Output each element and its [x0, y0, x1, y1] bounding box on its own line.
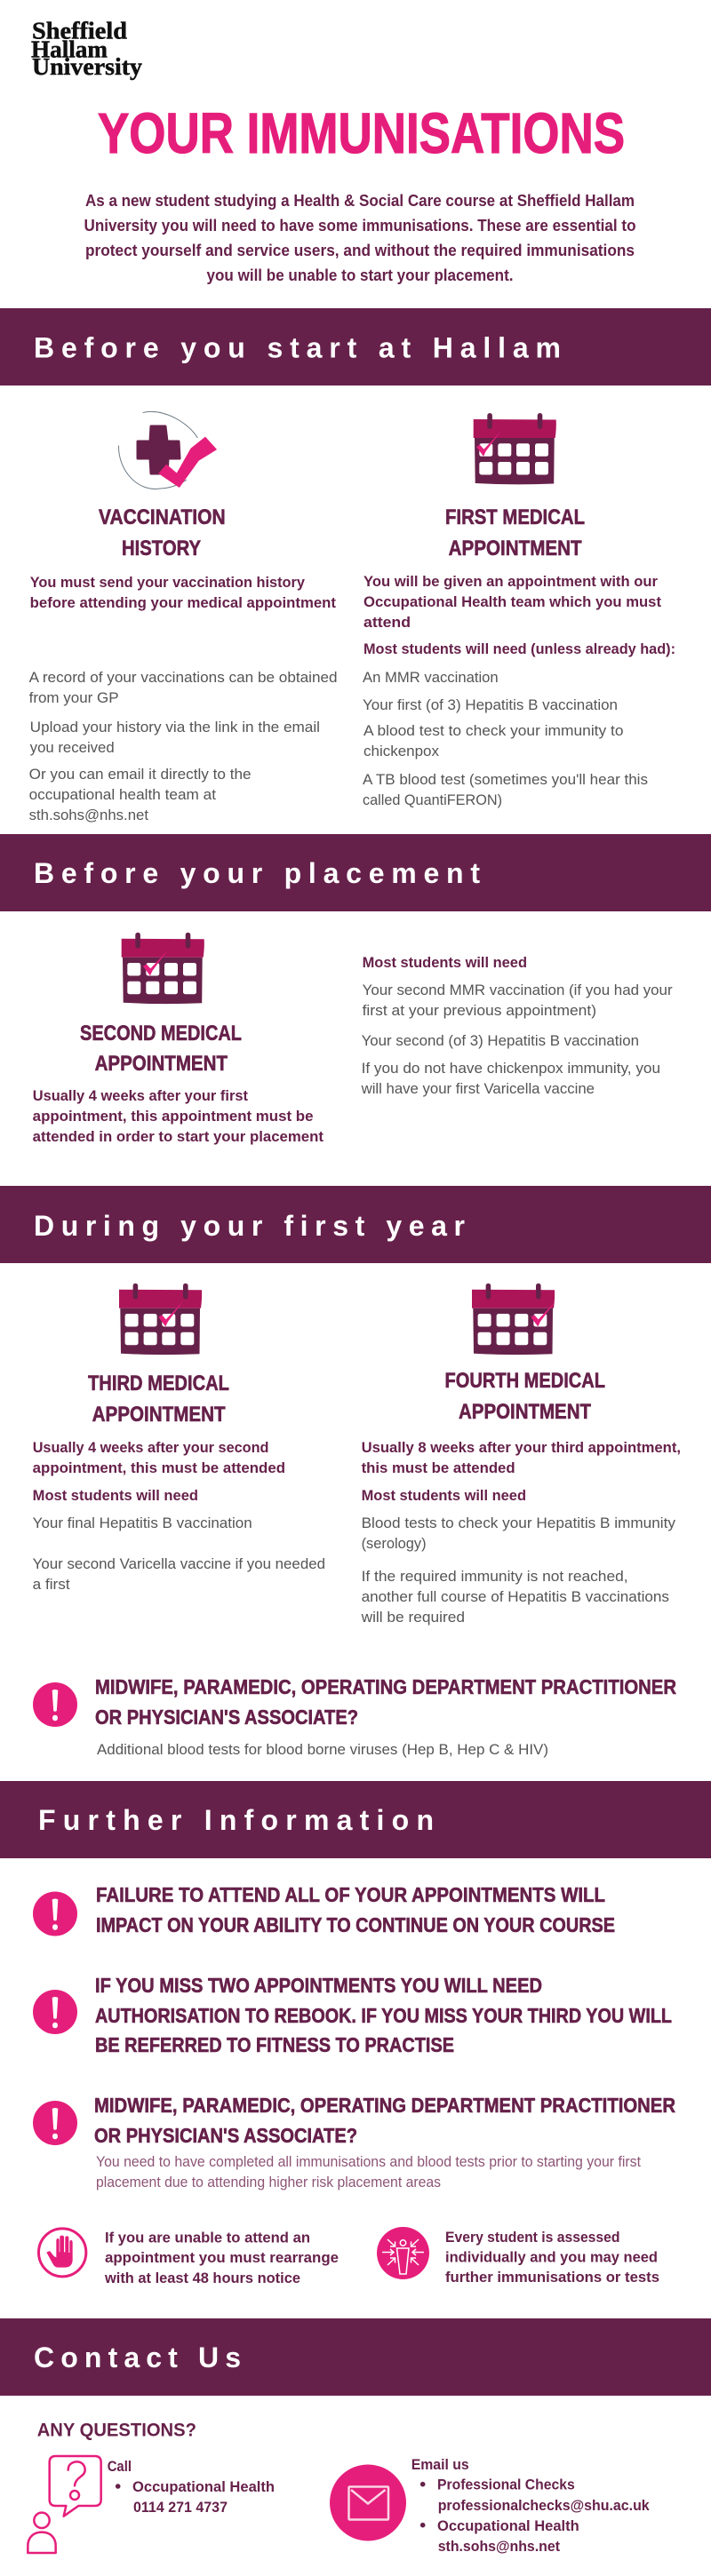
body text: Your final Hepatitis B vaccination — [33, 1515, 252, 1531]
icon: person with arrows pointing inward — [377, 2227, 429, 2279]
icon: exclamation — [33, 1990, 77, 2034]
body text: Your second (of 3) Hepatitis B vaccination — [362, 1033, 639, 1049]
notice text: If you are unable to attend an — [105, 2230, 310, 2246]
heading: fourth medical appointment: FOURTH MEDICAL — [444, 1369, 605, 1393]
notice text: further immunisations or tests — [445, 2270, 659, 2286]
section header: Further Information — [0, 1781, 711, 1858]
section header: During your first year: During your first year — [34, 1210, 465, 1242]
notice text — [445, 2230, 659, 2286]
lead text: Most students will need (unless already had): — [363, 641, 675, 657]
callout text: You need to have completed all immunisations and blood tests prior to starting your first — [96, 2154, 641, 2170]
icon: email envelope — [330, 2464, 406, 2540]
callout text — [96, 2154, 641, 2190]
body text: A blood test to check your immunity to — [363, 723, 624, 739]
panel: contact details — [28, 2421, 650, 2555]
body text: Or you can email it directly to the — [29, 767, 252, 783]
callout: midwife and paramedic placement — [33, 2094, 675, 2190]
callout heading: OR PHYSICIAN'S ASSOCIATE? — [95, 1705, 358, 1729]
icon: calendar third day ticked — [119, 1284, 202, 1355]
call details: 0114 271 4737 — [133, 2500, 228, 2516]
lead text: Most students will need — [363, 955, 527, 971]
body text: called QuantiFERON) — [363, 792, 502, 808]
icon: exclamation — [33, 2101, 77, 2145]
body text: will be required — [361, 1610, 465, 1626]
lead text: Usually 8 weeks after your third appointment, — [362, 1440, 681, 1456]
icon: stop hand — [38, 2229, 86, 2277]
heading: vaccination history: VACCINATION — [99, 505, 226, 529]
lead text: Usually 4 weeks after your second — [33, 1440, 268, 1456]
logo: Sheffield Hallam University: Sheffield — [32, 17, 127, 44]
lead text: You will be given an appointment with our — [363, 574, 659, 590]
lead text: Usually 4 weeks after your first — [33, 1088, 248, 1104]
section header: Before you start at Hallam: Before you start at Hallam — [34, 332, 561, 364]
intro text block: you will be unable to start your placement. — [206, 266, 514, 284]
heading: second medical appointment — [80, 1022, 242, 1076]
body text: Your first (of 3) Hepatitis B vaccination — [363, 697, 618, 713]
email details: Email us — [411, 2457, 469, 2473]
lead text — [30, 575, 337, 611]
panel: vaccination history — [29, 411, 338, 823]
notice: individual assessment — [377, 2227, 659, 2286]
section header: Before you start at Hallam — [0, 308, 711, 386]
intro text block — [84, 192, 636, 284]
lead text: appointment, this appointment must be — [33, 1109, 313, 1125]
heading: fourth medical appointment: APPOINTMENT — [459, 1400, 591, 1424]
body text — [361, 1515, 676, 1626]
body text: chickenpox — [363, 743, 440, 759]
icon: exclamation — [33, 1682, 77, 1727]
logo: Sheffield Hallam University — [31, 17, 143, 80]
body text: Your second Varicella vaccine if you needed — [33, 1556, 325, 1572]
lead text: this must be attended — [362, 1460, 515, 1476]
body text: will have your first Varicella vaccine — [361, 1081, 595, 1097]
call details: Call — [108, 2459, 132, 2475]
lead text: before attending your medical appointment — [30, 595, 337, 611]
body text: occupational health team at — [29, 787, 216, 803]
callout heading — [95, 1675, 676, 1729]
intro text block: University you will need to have some immunisations. These are essential to — [84, 217, 636, 235]
email details — [411, 2457, 650, 2555]
heading: vaccination history: HISTORY — [122, 537, 201, 561]
heading: second medical appointment: SECOND MEDICAL — [80, 1022, 242, 1046]
intro text block: As a new student studying a Health & Social Care course at Sheffield Hallam — [85, 192, 635, 210]
lead text: attended in order to start your placement — [33, 1129, 324, 1145]
heading: fourth medical appointment — [444, 1369, 605, 1424]
callout heading: IMPACT ON YOUR ABILITY TO CONTINUE ON YOUR COURSE — [96, 1913, 615, 1936]
notice: rearrange appointment — [38, 2229, 339, 2286]
icon: calendar fourth day ticked — [472, 1284, 555, 1355]
intro text block: protect yourself and service users, and without the required immunisations — [85, 242, 635, 259]
section header: During your first year — [0, 1186, 711, 1263]
panel: second appointment needs — [361, 955, 673, 1097]
heading: third medical appointment — [88, 1371, 229, 1427]
body text: Upload your history via the link in the email — [30, 720, 320, 735]
body text — [361, 982, 673, 1097]
heading: any questions: ANY QUESTIONS? — [37, 2421, 196, 2441]
body text: a first — [33, 1577, 70, 1593]
body text: first at your previous appointment) — [363, 1003, 596, 1019]
panel: first medical appointment — [363, 413, 675, 808]
heading: first medical appointment: FIRST MEDICAL — [445, 505, 585, 529]
callout heading — [95, 1974, 672, 2056]
section header: Further Information: Further Information — [38, 1804, 434, 1836]
callout text: Additional blood tests for blood borne viruses (Hep B, Hep C & HIV) — [97, 1742, 548, 1758]
body text — [33, 1515, 325, 1593]
notice text: appointment you must rearrange — [105, 2250, 339, 2266]
call details: Occupational Health — [132, 2479, 275, 2495]
notice text: with at least 48 hours notice — [104, 2270, 300, 2286]
body text: Your second MMR vaccination (if you had your — [363, 982, 673, 998]
heading: third medical appointment: APPOINTMENT — [92, 1403, 226, 1427]
callout heading: BE REFERRED TO FITNESS TO PRACTISE — [95, 2033, 454, 2056]
logo: Sheffield Hallam University: Hallam — [31, 36, 108, 62]
section header: Before your placement — [0, 834, 711, 911]
notice text: Every student is assessed — [445, 2230, 620, 2246]
section header: Before your placement: Before your placement — [34, 857, 480, 889]
icon: calendar second day ticked — [122, 933, 204, 1004]
heading: third medical appointment: THIRD MEDICAL — [88, 1371, 229, 1395]
callout: midwife and paramedic additional tests — [33, 1675, 676, 1758]
body text: If you do not have chickenpox immunity, you — [362, 1061, 660, 1077]
lead text — [33, 1440, 285, 1504]
body text: An MMR vaccination — [363, 670, 499, 686]
icon: medical cross with tick — [118, 411, 216, 489]
callout heading: OR PHYSICIAN'S ASSOCIATE? — [94, 2124, 357, 2147]
panel: second medical appointment — [33, 933, 324, 1145]
lead text — [33, 1088, 324, 1145]
body text: you received — [30, 740, 115, 756]
callout heading: FAILURE TO ATTEND ALL OF YOUR APPOINTMENTS WILL — [96, 1883, 605, 1906]
lead text: You must send your vaccination history — [30, 575, 306, 591]
icon: exclamation — [33, 1892, 77, 1936]
body text: A record of your vaccinations can be obtained — [29, 670, 338, 686]
body text — [363, 670, 648, 808]
lead text: Most students will need — [33, 1488, 198, 1504]
body text — [29, 670, 338, 823]
panel: third medical appointment — [33, 1284, 325, 1593]
lead text — [362, 1440, 681, 1504]
body text: from your GP — [29, 690, 119, 706]
callout: failure to attend — [33, 1883, 615, 1936]
section header: Contact Us: Contact Us — [34, 2341, 241, 2373]
email details: sth.sohs@nhs.net — [438, 2539, 560, 2555]
icon: calendar first day ticked — [474, 413, 556, 484]
body text: another full course of Hepatitis B vaccinations — [362, 1589, 669, 1605]
callout heading — [94, 2094, 675, 2147]
call details — [108, 2459, 275, 2516]
lead text: Most students will need — [362, 1488, 526, 1504]
lead text: attend — [363, 615, 411, 631]
logo: Sheffield Hallam University: University — [32, 53, 143, 80]
notice text — [104, 2230, 339, 2286]
section header: Contact Us — [0, 2318, 711, 2396]
lead text — [363, 574, 675, 657]
panel: fourth medical appointment — [361, 1284, 681, 1626]
callout: missed appointments — [33, 1974, 672, 2056]
body text: Blood tests to check your Hepatitis B immunity — [362, 1515, 676, 1531]
callout text: placement due to attending higher risk placement areas — [96, 2174, 441, 2190]
callout heading: IF YOU MISS TWO APPOINTMENTS YOU WILL NEED — [95, 1974, 542, 1997]
heading: first medical appointment: APPOINTMENT — [449, 537, 582, 561]
body text: sth.sohs@nhs.net — [29, 807, 148, 823]
heading: vaccination history — [99, 505, 226, 561]
body text: If the required immunity is not reached, — [362, 1569, 628, 1585]
lead text: Occupational Health team which you must — [363, 594, 661, 610]
heading: second medical appointment: APPOINTMENT — [95, 1052, 228, 1076]
heading: first medical appointment — [445, 505, 585, 561]
body text: (serology) — [362, 1536, 427, 1552]
email details: Professional Checks — [437, 2477, 575, 2493]
callout heading — [96, 1883, 615, 1936]
notice text: individually and you may need — [445, 2249, 658, 2265]
lead text: appointment, this must be attended — [33, 1460, 285, 1476]
body text: A TB blood test (sometimes you'll hear this — [363, 772, 648, 788]
email details: professionalchecks@shu.ac.uk — [438, 2498, 650, 2514]
icon: person with question speech bubble — [28, 2456, 101, 2553]
email details: Occupational Health — [437, 2518, 579, 2534]
